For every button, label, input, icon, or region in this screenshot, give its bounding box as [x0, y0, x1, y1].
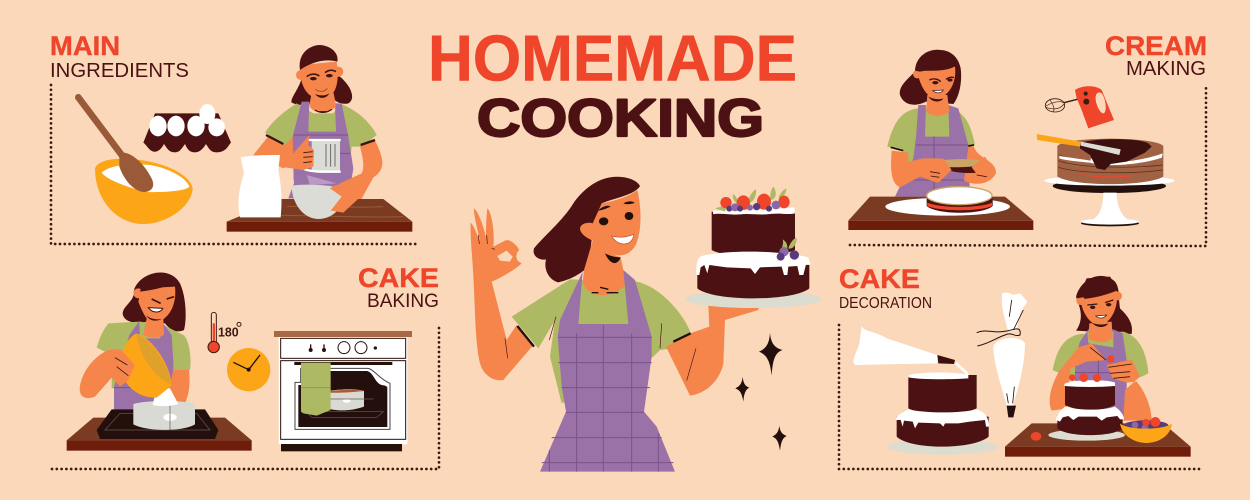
shirt	[512, 279, 691, 403]
oven towel	[301, 363, 331, 416]
figure: woman sifting flour	[227, 45, 412, 232]
figure: woman holding cake layer	[887, 50, 996, 197]
heading: cake decoration: CAKE	[839, 264, 920, 294]
panel: cake baking	[52, 263, 439, 469]
icon: clock	[227, 348, 270, 391]
cake pan in oven	[323, 389, 364, 410]
flour bag	[239, 155, 281, 217]
cake layer in hands	[928, 159, 990, 173]
baking tray	[97, 409, 218, 439]
heading: main ingredients: MAIN	[50, 31, 120, 61]
finished two tier cake	[1048, 373, 1125, 441]
woman's hair	[534, 177, 640, 282]
title: COOKING	[477, 89, 764, 148]
wooden table	[1005, 423, 1191, 457]
strawberry on table	[1031, 432, 1041, 441]
heading: cream making	[1105, 31, 1207, 80]
icon: hand mixer	[1045, 86, 1114, 128]
figure: woman decorating cake	[1050, 276, 1152, 421]
heading: cream making: CREAM	[1105, 31, 1207, 61]
leaves, strawberries and blueberries	[715, 187, 799, 261]
title	[428, 22, 797, 148]
heading: cake baking: CAKE	[358, 263, 439, 293]
purple apron	[540, 270, 675, 472]
heading: cake decoration: DECORATION	[839, 295, 932, 312]
wooden table	[227, 199, 412, 232]
icon: standing piping bag	[977, 293, 1027, 417]
two tier cake being iced	[887, 372, 998, 455]
wooden table	[848, 197, 1033, 230]
batter stream	[138, 357, 178, 406]
heading: cake decoration	[839, 264, 932, 312]
orange mixing bowl	[120, 333, 172, 398]
title: HOMEMADE	[428, 22, 797, 94]
bowl of berries	[1120, 417, 1172, 443]
mixing bowl	[292, 185, 346, 219]
heading: main ingredients	[50, 31, 189, 82]
heading: cream making: MAKING	[1126, 58, 1206, 80]
right arm holding plate	[666, 302, 760, 396]
sparkles	[735, 333, 787, 451]
heading: cake baking	[358, 263, 439, 312]
icon: egg carton	[143, 104, 231, 152]
face	[580, 190, 641, 293]
icon: bowl with flour and spoon	[78, 97, 193, 224]
icon: oven	[274, 331, 412, 451]
flour sifter	[302, 140, 341, 172]
heading: cake baking: BAKING	[367, 291, 439, 312]
heading: main ingredients: INGREDIENTS	[50, 60, 189, 82]
cake on white plate	[885, 187, 1010, 216]
cake ring mould	[133, 401, 195, 430]
panel: cake decoration	[839, 264, 1202, 469]
icon: thermometer 180 degrees	[208, 312, 241, 353]
icon: cake on stand with spatula	[1037, 134, 1175, 226]
figure: central chef holding cake	[471, 177, 822, 472]
neck	[583, 238, 626, 295]
cake on plate	[685, 187, 822, 308]
icon: thermometer 180 degrees: 180	[218, 325, 239, 340]
raised hand OK sign	[471, 208, 533, 380]
panel: cream making	[848, 31, 1207, 246]
wooden table	[67, 418, 252, 451]
figure: woman pouring batter	[67, 272, 252, 451]
icon: piping bag with icing	[853, 326, 968, 377]
